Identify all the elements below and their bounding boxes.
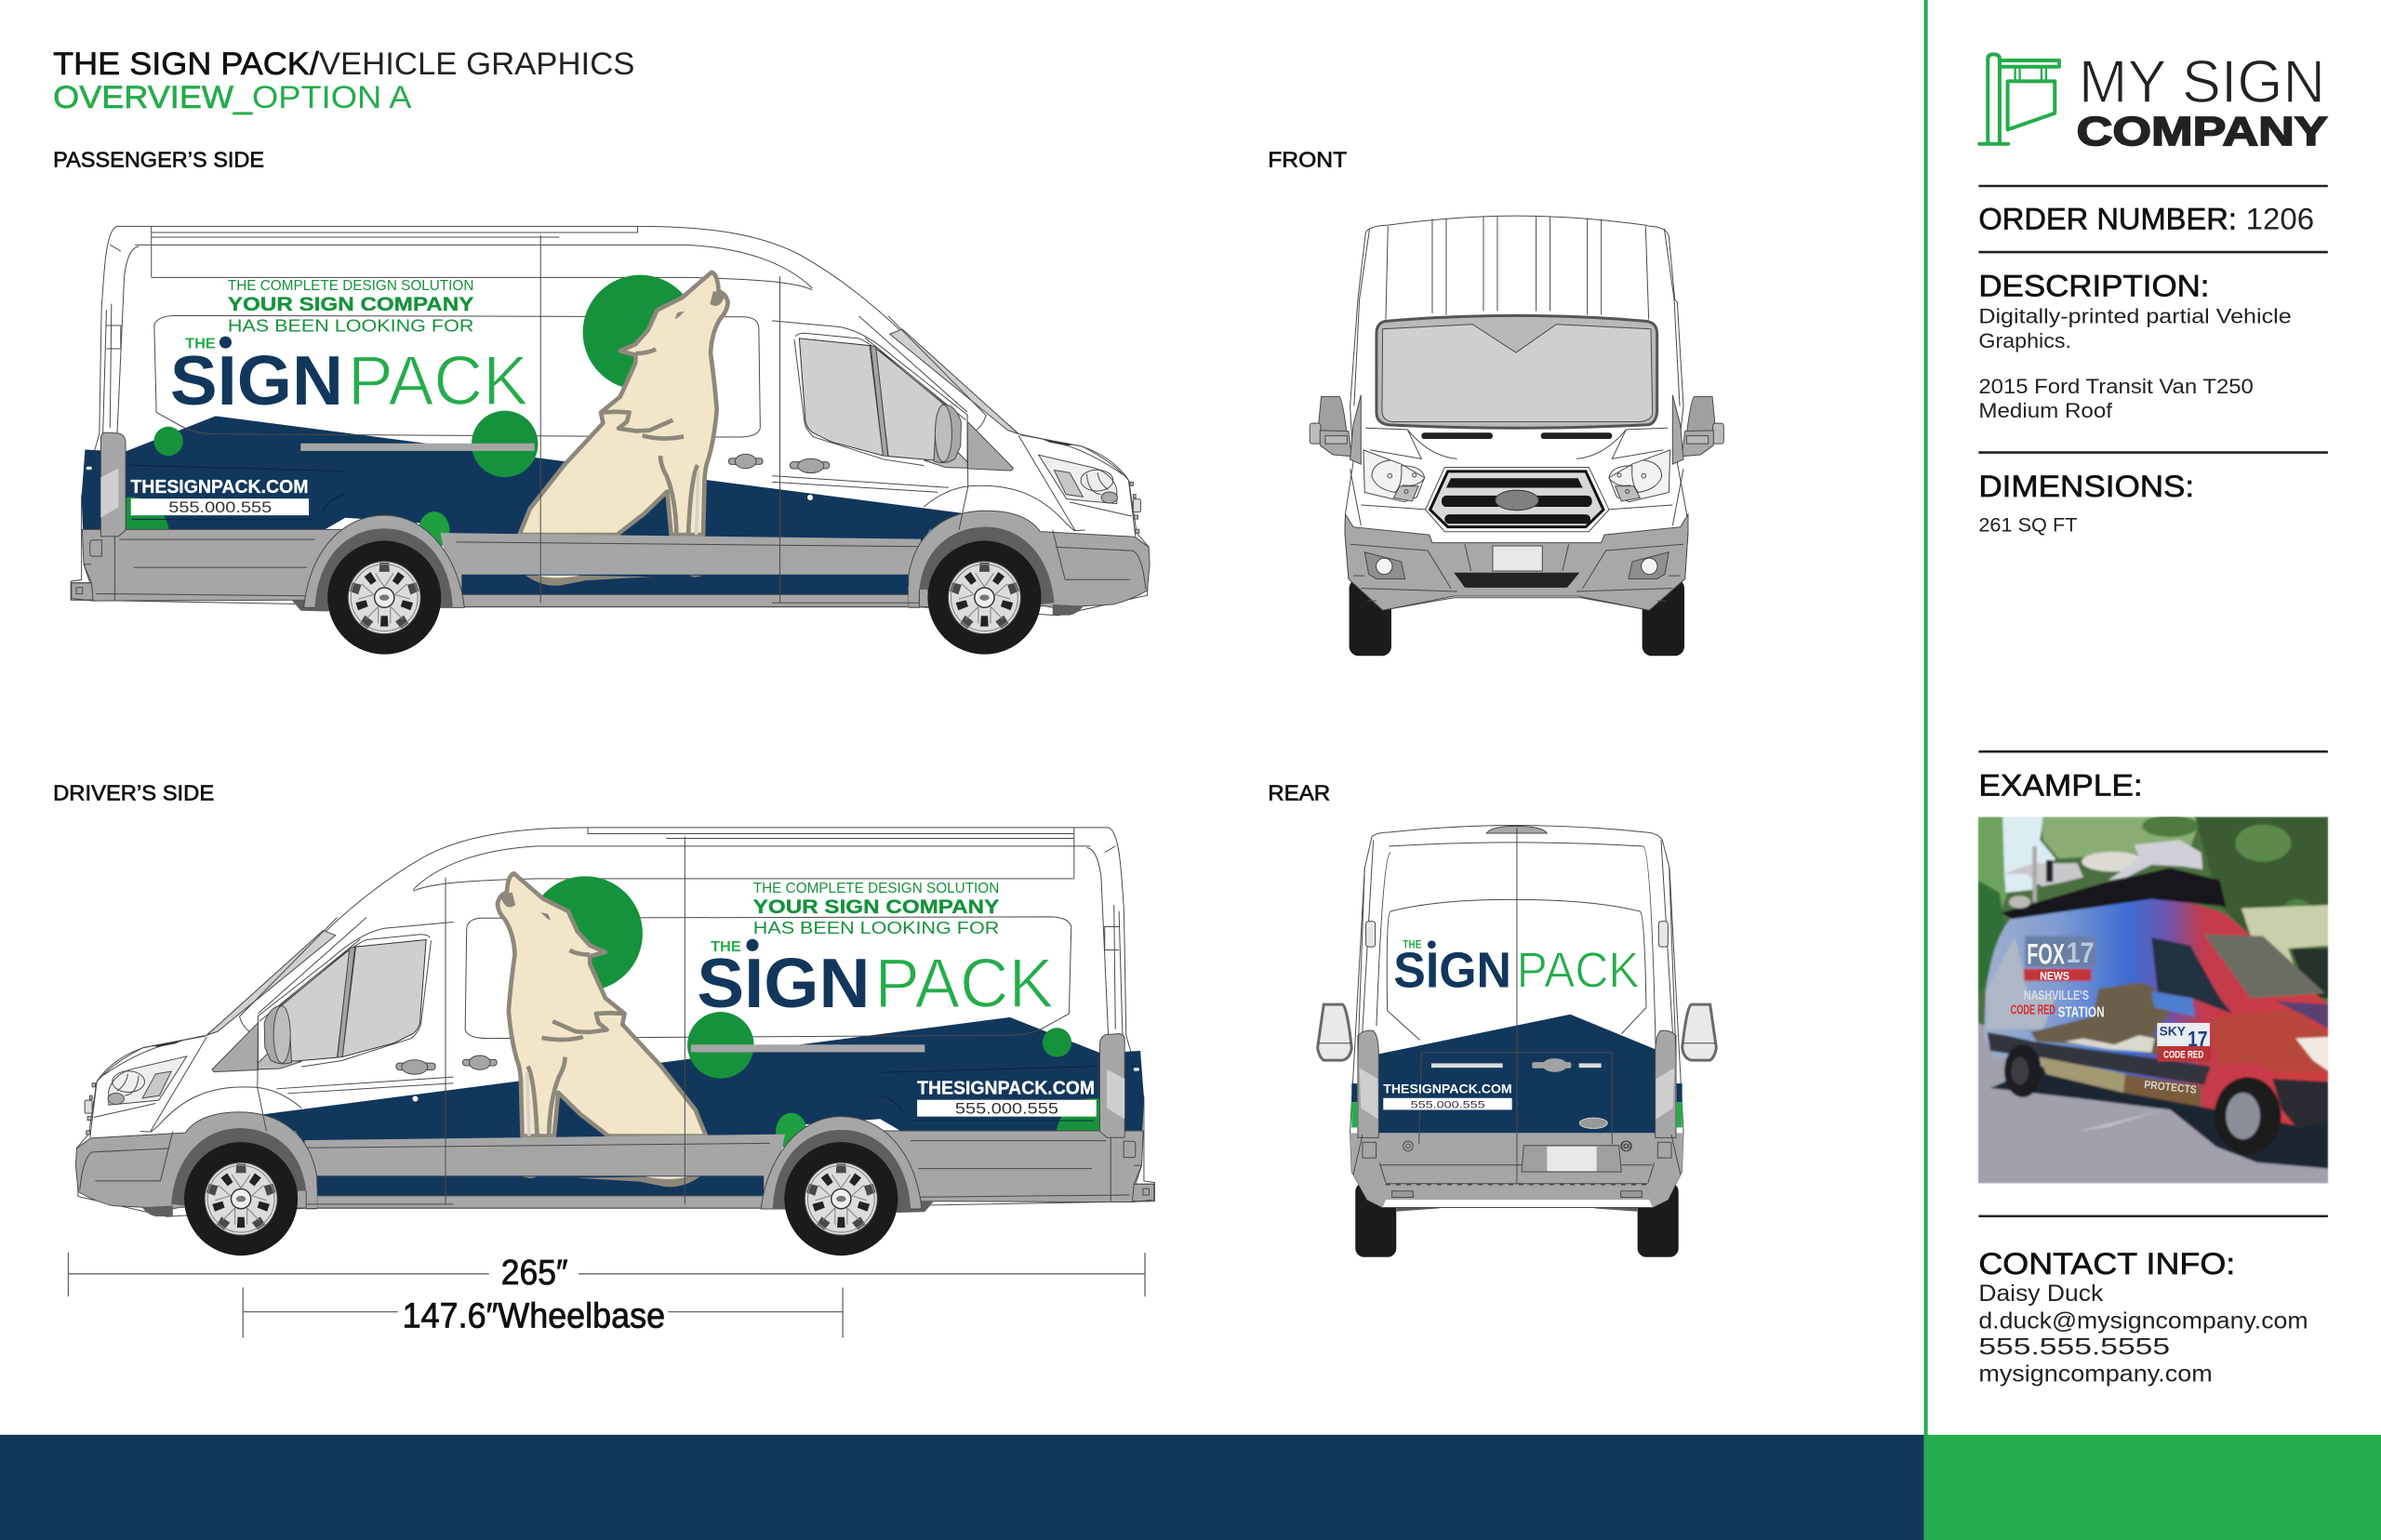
van graphic: web address and phone: 555.000.555 <box>955 1101 1058 1118</box>
contact info: mysigncompany.com <box>1978 1361 2213 1387</box>
van graphic: slogan: YOUR SIGN COMPANY <box>228 294 473 315</box>
van graphic: Sign Pack logo: PACK <box>348 341 528 419</box>
van: passenger's side <box>71 226 1150 655</box>
van graphic: slogan: THE COMPLETE DESIGN SOLUTION <box>228 278 473 294</box>
photo van lettering <box>2011 936 2212 1096</box>
description: Graphics. <box>1978 329 2071 352</box>
van graphic: Sign Pack logo: SIGN <box>697 944 871 1022</box>
van graphic: web address and phone <box>130 477 309 516</box>
order number: 1206 <box>2246 202 2314 236</box>
title: OPTION A <box>252 80 412 115</box>
title: VEHICLE GRAPHICS <box>319 46 634 82</box>
photo van lettering: STATION <box>2058 1004 2105 1020</box>
photo van lettering: CODE RED <box>2163 1049 2204 1060</box>
van graphic: slogan: HAS BEEN LOOKING FOR <box>228 316 473 336</box>
example photo: wrapped news van <box>1978 816 2328 1184</box>
dimension: wheelbase: 147.6″Wheelbase <box>403 1296 665 1336</box>
description <box>1978 268 2292 422</box>
rear web address and phone <box>1383 1082 1512 1110</box>
van graphic: web address and phone: THESIGNPACK.COM <box>917 1078 1095 1098</box>
dimensions <box>1978 469 2194 536</box>
title: THE SIGN PACK/ <box>53 46 319 82</box>
dimension: overall length: 265″ <box>501 1253 568 1293</box>
van graphic: slogan: THE COMPLETE DESIGN SOLUTION <box>753 881 999 896</box>
van graphic: Sign Pack logo <box>170 337 528 419</box>
description: Medium Roof <box>1978 399 2113 422</box>
contact info: Daisy Duck <box>1978 1281 2104 1307</box>
van graphic: Sign Pack logo: THE <box>711 939 741 955</box>
photo van lettering: FOX <box>2027 937 2065 971</box>
van graphic: web address and phone: 555.000.555 <box>168 499 272 516</box>
van graphic: web address and phone <box>917 1078 1097 1118</box>
description: 2015 Ford Transit Van T250 <box>1978 375 2254 398</box>
grille <box>1426 467 1609 532</box>
van graphic: Sign Pack logo: PACK <box>874 944 1054 1022</box>
footer bar: green <box>1924 1435 2381 1540</box>
photo van lettering: CODE RED <box>2011 1003 2055 1018</box>
logo: My Sign Company: MY SIGN <box>2079 47 2325 115</box>
dimensions: 261 SQ FT <box>1978 514 2078 536</box>
rear web address and phone: THESIGNPACK.COM <box>1383 1082 1512 1096</box>
icon: hanging sign <box>1979 54 2059 144</box>
sidebar rules <box>1978 186 2328 1216</box>
van graphic: slogan: HAS BEEN LOOKING FOR <box>753 918 999 937</box>
title: OVERVIEW_ <box>53 80 253 115</box>
logo: My Sign Company: COMPANY <box>2077 109 2328 154</box>
photo van lettering: 17 <box>2188 1027 2208 1051</box>
rear logo <box>1393 937 1640 999</box>
label: driver's side: DRIVER’S SIDE <box>53 780 214 804</box>
dimensions: DIMENSIONS: <box>1978 469 2194 503</box>
footer bar: navy <box>0 1435 1924 1540</box>
van graphic: slogan <box>228 278 473 336</box>
contact info <box>1978 1246 2308 1387</box>
photo van lettering: SKY <box>2160 1023 2187 1038</box>
van: front view <box>1310 216 1723 656</box>
sidebar green divider <box>1924 0 1928 1436</box>
van graphic: slogan <box>753 881 999 937</box>
description: Digitally-printed partial Vehicle <box>1978 305 2292 328</box>
dimension lines <box>68 1253 1145 1337</box>
order number: ORDER NUMBER: <box>1978 202 2237 236</box>
van graphic: slogan: YOUR SIGN COMPANY <box>753 896 999 918</box>
photo van lettering: NEWS <box>2040 969 2069 982</box>
label: front: FRONT <box>1268 148 1347 172</box>
rear web address and phone: 555.000.555 <box>1411 1099 1485 1110</box>
van graphic: Sign Pack logo: SIGN <box>170 341 343 419</box>
photo van lettering: NASHVILLE'S <box>2024 989 2089 1003</box>
contact info: CONTACT INFO: <box>1978 1246 2235 1281</box>
label: rear: REAR <box>1268 780 1330 804</box>
label: passenger's side: PASSENGER’S SIDE <box>53 148 264 172</box>
van graphic: web address and phone: THESIGNPACK.COM <box>130 477 308 498</box>
van: driver's side <box>75 828 1154 1255</box>
logo: My Sign Company <box>1979 47 2328 154</box>
van graphic: Sign Pack logo <box>697 939 1054 1022</box>
photo van lettering: PROTECTS <box>2144 1078 2197 1096</box>
van: rear view <box>1318 826 1716 1257</box>
example heading: EXAMPLE: <box>1978 768 2143 803</box>
rear logo: THE <box>1403 937 1421 950</box>
contact info: d.duck@mysigncompany.com <box>1978 1308 2308 1334</box>
title <box>53 46 634 115</box>
description: DESCRIPTION: <box>1978 268 2210 302</box>
rear logo: SIGN <box>1393 944 1511 999</box>
photo van lettering: 17 <box>2067 936 2095 969</box>
contact info: 555.555.5555 <box>1978 1334 2170 1360</box>
rear logo: PACK <box>1517 944 1640 999</box>
van graphic: Sign Pack logo: THE <box>185 337 216 352</box>
